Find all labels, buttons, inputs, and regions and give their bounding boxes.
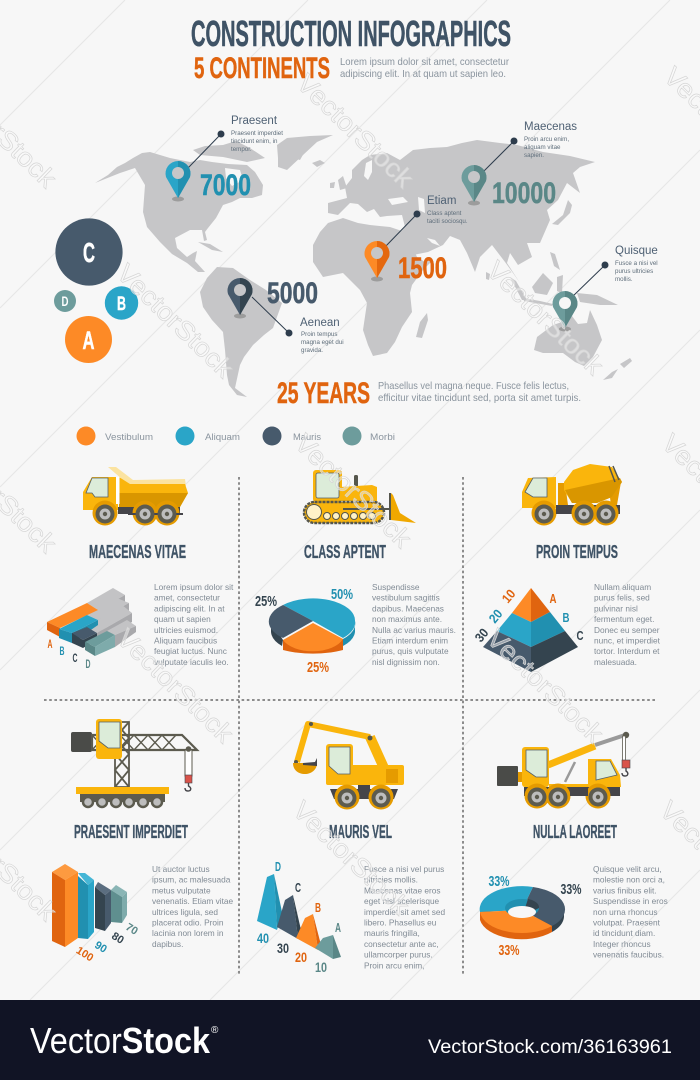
pin: Etiam 1500: taciti sociosqu. <box>427 218 468 225</box>
text: panel 4: dapibus. <box>152 939 183 949</box>
heading: Mauris Vel: MAURIS VEL <box>329 821 392 842</box>
map: inland seas <box>225 160 440 246</box>
chart: mountain peaks <box>257 859 341 975</box>
text: panel 1: vulputate iaculis leo. <box>154 657 229 667</box>
pin: Maecenas 10000: sapien. <box>524 152 544 159</box>
bubble chart <box>54 218 138 363</box>
chart: 3D donut: 33% <box>488 873 510 890</box>
text: panel 3: Nullam aliquam <box>594 582 651 592</box>
text: panel 6: volutpat. Praesent <box>593 918 661 928</box>
text: panel 4: metus vulputate <box>152 885 211 895</box>
watermarks: VectorStock <box>111 258 240 384</box>
chart: pyramid: B <box>562 610 570 625</box>
chart: 3D bars: 90 <box>92 939 109 956</box>
watermarks: VectorStock <box>481 255 610 381</box>
legend: Mauris <box>293 432 321 443</box>
chart: mountain peaks: A <box>335 920 341 935</box>
map: Eurasia <box>328 140 595 283</box>
text: panel 4: ultrices ligula, sed <box>152 907 218 917</box>
text: panel 1: amet, consectetur <box>154 593 220 603</box>
pin: Quisque: Fusce a nisi vel <box>615 260 658 267</box>
text: panel 3: malesuada. <box>594 657 637 667</box>
text: panel 5: ultricies mollis. <box>364 875 418 885</box>
intro text: Lorem ipsum dolor sit amet, consectetur <box>340 57 510 68</box>
chart: pyramid: 30 <box>472 625 491 645</box>
footer bar: VectorStock.com/36163961 <box>428 1037 672 1058</box>
chart: 3D donut: 33% <box>560 881 582 898</box>
chart: pyramid: C <box>576 628 584 643</box>
chart: isometric bars <box>47 588 136 671</box>
text: panel 1: Aliquam faucibus <box>154 636 217 646</box>
chart: isometric bars: A <box>48 637 53 651</box>
text: panel 6: Quisque velit arcu, <box>593 864 662 874</box>
chart: mountain peaks: 40 <box>257 930 269 946</box>
legend: Morbi <box>370 432 395 443</box>
text: panel 2: purus, quis vulputate <box>372 646 449 656</box>
25 years callout: efficitur vitae tincidunt sed, porta sit amet turpis. <box>378 393 581 404</box>
legend: Vestibulum <box>105 432 153 443</box>
pin: Etiam 1500: Class aptent <box>427 210 462 217</box>
chart: mountain peaks: 10 <box>315 959 327 975</box>
pin: Quisque <box>552 245 658 332</box>
chart: isometric bars: B <box>60 644 65 658</box>
chart: mountain peaks: 30 <box>277 940 289 956</box>
chart: pyramid: 10 <box>499 586 518 606</box>
text: panel 3: pulvinar nisl <box>594 603 638 613</box>
watermarks: VectorStock <box>481 623 610 749</box>
icon: mobile crane truck <box>497 732 630 808</box>
text: panel 2: vestibulum sagittis <box>372 593 440 603</box>
chart: isometric bars: C <box>72 651 78 665</box>
chart: pyramid <box>472 586 584 672</box>
text: panel 6: venenatis faucibus. <box>593 950 664 960</box>
chart: 3D bars: 80 <box>109 930 126 947</box>
intro text <box>340 57 510 80</box>
text: panel 5: Proin arcu enim, <box>364 960 424 970</box>
heading: Nulla Laoreet: NULLA LAOREET <box>533 821 617 842</box>
map: Greenland <box>277 135 333 170</box>
pin: Aenean 5000: magna eget dui <box>301 339 344 346</box>
heading: Maecenas Vitae: MAECENAS VITAE <box>89 541 186 562</box>
watermarks: VectorStock <box>287 795 416 921</box>
map: North America <box>95 152 263 272</box>
map: South America <box>200 267 282 397</box>
pin: Quisque: Quisque <box>615 245 658 257</box>
icon: tower crane <box>71 719 197 807</box>
text: panel 4: placerat odio. Proin <box>152 918 224 928</box>
chart: mountain peaks: C <box>295 880 301 895</box>
text: panel 2: nisl dignissim non. <box>372 657 440 667</box>
bubble chart: B <box>117 294 126 315</box>
text: panel 1: adipiscing elit. In at <box>154 603 225 613</box>
text: panel 6: Integer rhoncus <box>593 939 651 949</box>
legend: Aliquam <box>205 432 240 443</box>
pin: Praesent 7000 <box>166 115 283 202</box>
pin: Etiam 1500: Etiam <box>427 195 456 207</box>
chart: 3D pie <box>255 586 355 676</box>
pin: Praesent 7000: tempor. <box>231 146 252 153</box>
text: panel 5: mauris fringilla, <box>364 928 420 938</box>
pin: Maecenas 10000: Proin arcu enim, <box>524 136 569 143</box>
pin: Maecenas 10000: aliquam vitae <box>524 144 561 151</box>
text: panel 2: non maximus ante. <box>372 614 442 624</box>
icon: cement mixer truck <box>522 464 622 526</box>
text: panel 4: Ut auctor luctus <box>152 864 210 874</box>
pin: Maecenas 10000: 10000 <box>492 177 556 210</box>
map: Australia <box>534 310 602 366</box>
25 years callout: Phasellus vel magna neque. Fusce felis lectus, <box>378 381 569 392</box>
chart: mountain peaks: 20 <box>295 949 307 965</box>
chart: 3D pie: 25% <box>255 593 277 610</box>
chart: 3D donut <box>480 873 582 959</box>
25 years callout <box>277 377 581 410</box>
legend <box>76 426 395 446</box>
text: panel 5: Maecenas vitae eros <box>364 885 441 895</box>
text: panel 4: ipsum, ac malesuada <box>152 875 231 885</box>
footer bar <box>0 1000 700 1080</box>
text: panel 6: id tincidunt diam. <box>593 928 655 938</box>
intro text: adipiscing elit. In at quam ut sapien leo. <box>340 69 506 80</box>
text: panel 2: Suspendisse <box>372 582 420 592</box>
text: panel 3: nunc, et imperdiet <box>594 636 661 646</box>
map: Arctic islands <box>193 141 265 162</box>
watermarks: VectorStock <box>291 68 420 194</box>
text: panel 3: fermentum eget. <box>594 614 654 624</box>
subtitle: 5 continents: 5 CONTINENTS <box>194 52 330 85</box>
watermarks: VectorStock <box>289 428 418 554</box>
pin: Aenean 5000: Proin tempus <box>301 331 337 338</box>
text: panel 1: Lorem ipsum dolor sit <box>154 582 234 592</box>
text: panel 4: lacinia non lorem in <box>152 928 224 938</box>
chart: pyramid: A <box>550 591 557 606</box>
chart: 3D pie: 50% <box>331 586 353 603</box>
watermarks: VectorStock <box>111 623 240 749</box>
pin: Aenean 5000: gravida. <box>301 347 323 354</box>
bubble chart: C <box>83 237 95 268</box>
text: panel 6: varius finibus elit. <box>593 885 657 895</box>
pin: Etiam 1500 <box>364 195 468 285</box>
map: Africa <box>313 218 433 356</box>
chart: 3D bars: 100 <box>74 945 95 964</box>
heading: Praesent Imperdiet: PRAESENT IMPERDIET <box>74 821 188 842</box>
chart: 3D donut: 33% <box>498 942 520 959</box>
text: panel 6: Suspendisse in eros <box>593 896 668 906</box>
text: panel 5: Fusce a nisi vel purus <box>364 864 444 874</box>
text: panel 2: dapibus. Maecenas <box>372 603 444 613</box>
pin: Praesent 7000: Praesent imperdiet <box>231 130 283 137</box>
pin: Etiam 1500: 1500 <box>398 252 447 285</box>
text: panel 5: libero. Phasellus eu <box>364 918 437 928</box>
chart: 3D bars: 70 <box>123 921 140 938</box>
text: panel 1: feugiat luctus. Nunc <box>154 646 227 656</box>
text: panel 2: Nulla ac varius mauris. <box>372 625 456 635</box>
heading: Class Aptent: CLASS APTENT <box>304 541 386 562</box>
text: panel 1: quam ut sapien <box>154 614 211 624</box>
chart: 3D bars <box>52 864 140 964</box>
pin: Aenean 5000 <box>228 277 344 354</box>
text: panel 3: Donec eu semper <box>594 625 660 635</box>
text: panel 5: consectetur ante ac, <box>364 939 439 949</box>
chart: 3D pie: 25% <box>307 659 329 676</box>
text: panel 6: non urna rhoncus <box>593 907 658 917</box>
pin: Quisque: mollis. <box>615 276 633 283</box>
pin: Maecenas 10000 <box>461 121 577 210</box>
footer bar: ® <box>211 1025 219 1036</box>
pin: Aenean 5000: Aenean <box>300 317 340 329</box>
chart: isometric bars: D <box>86 657 91 671</box>
text: panel 2: Etiam interdum enim <box>372 636 448 646</box>
chart: mountain peaks: D <box>275 859 281 874</box>
pin: Quisque: purus ultricies <box>615 268 653 275</box>
pin: Maecenas 10000: Maecenas <box>524 121 577 133</box>
bubble chart: D <box>62 293 68 309</box>
text: panel 6: molestie non orci a, <box>593 875 665 885</box>
icon: dump truck <box>83 467 188 526</box>
pin: Praesent 7000: Praesent <box>231 115 278 127</box>
pin: Aenean 5000: 5000 <box>267 277 318 310</box>
chart: pyramid: 20 <box>486 606 505 626</box>
icon: excavator <box>293 722 404 810</box>
25 years callout: 25 YEARS <box>277 377 370 410</box>
text: panel 3: purus felis, sed <box>594 593 650 603</box>
pin: Praesent 7000: tincidunt enim, in <box>231 138 278 145</box>
footer bar: VectorStock <box>30 1020 211 1061</box>
text: panel 5: imperdiet sit amet sed <box>364 907 446 917</box>
heading: Proin Tempus: PROIN TEMPUS <box>536 541 618 562</box>
icon: bulldozer <box>304 470 416 523</box>
world map <box>95 135 632 397</box>
text: panel 1: ultricies euismod. <box>154 625 218 635</box>
text: panel 4: venenatis. Etiam vitae <box>152 896 234 906</box>
text: panel 5: eget nisl scelerisque <box>364 896 440 906</box>
map: islands <box>198 153 632 380</box>
text: panel 5: ullamcorper purus. <box>364 950 433 960</box>
pin: Praesent 7000: 7000 <box>200 169 251 202</box>
chart: mountain peaks: B <box>315 900 321 915</box>
bubble chart: A <box>82 327 94 355</box>
text: panel 3: tortor. Interdum et <box>594 646 660 656</box>
